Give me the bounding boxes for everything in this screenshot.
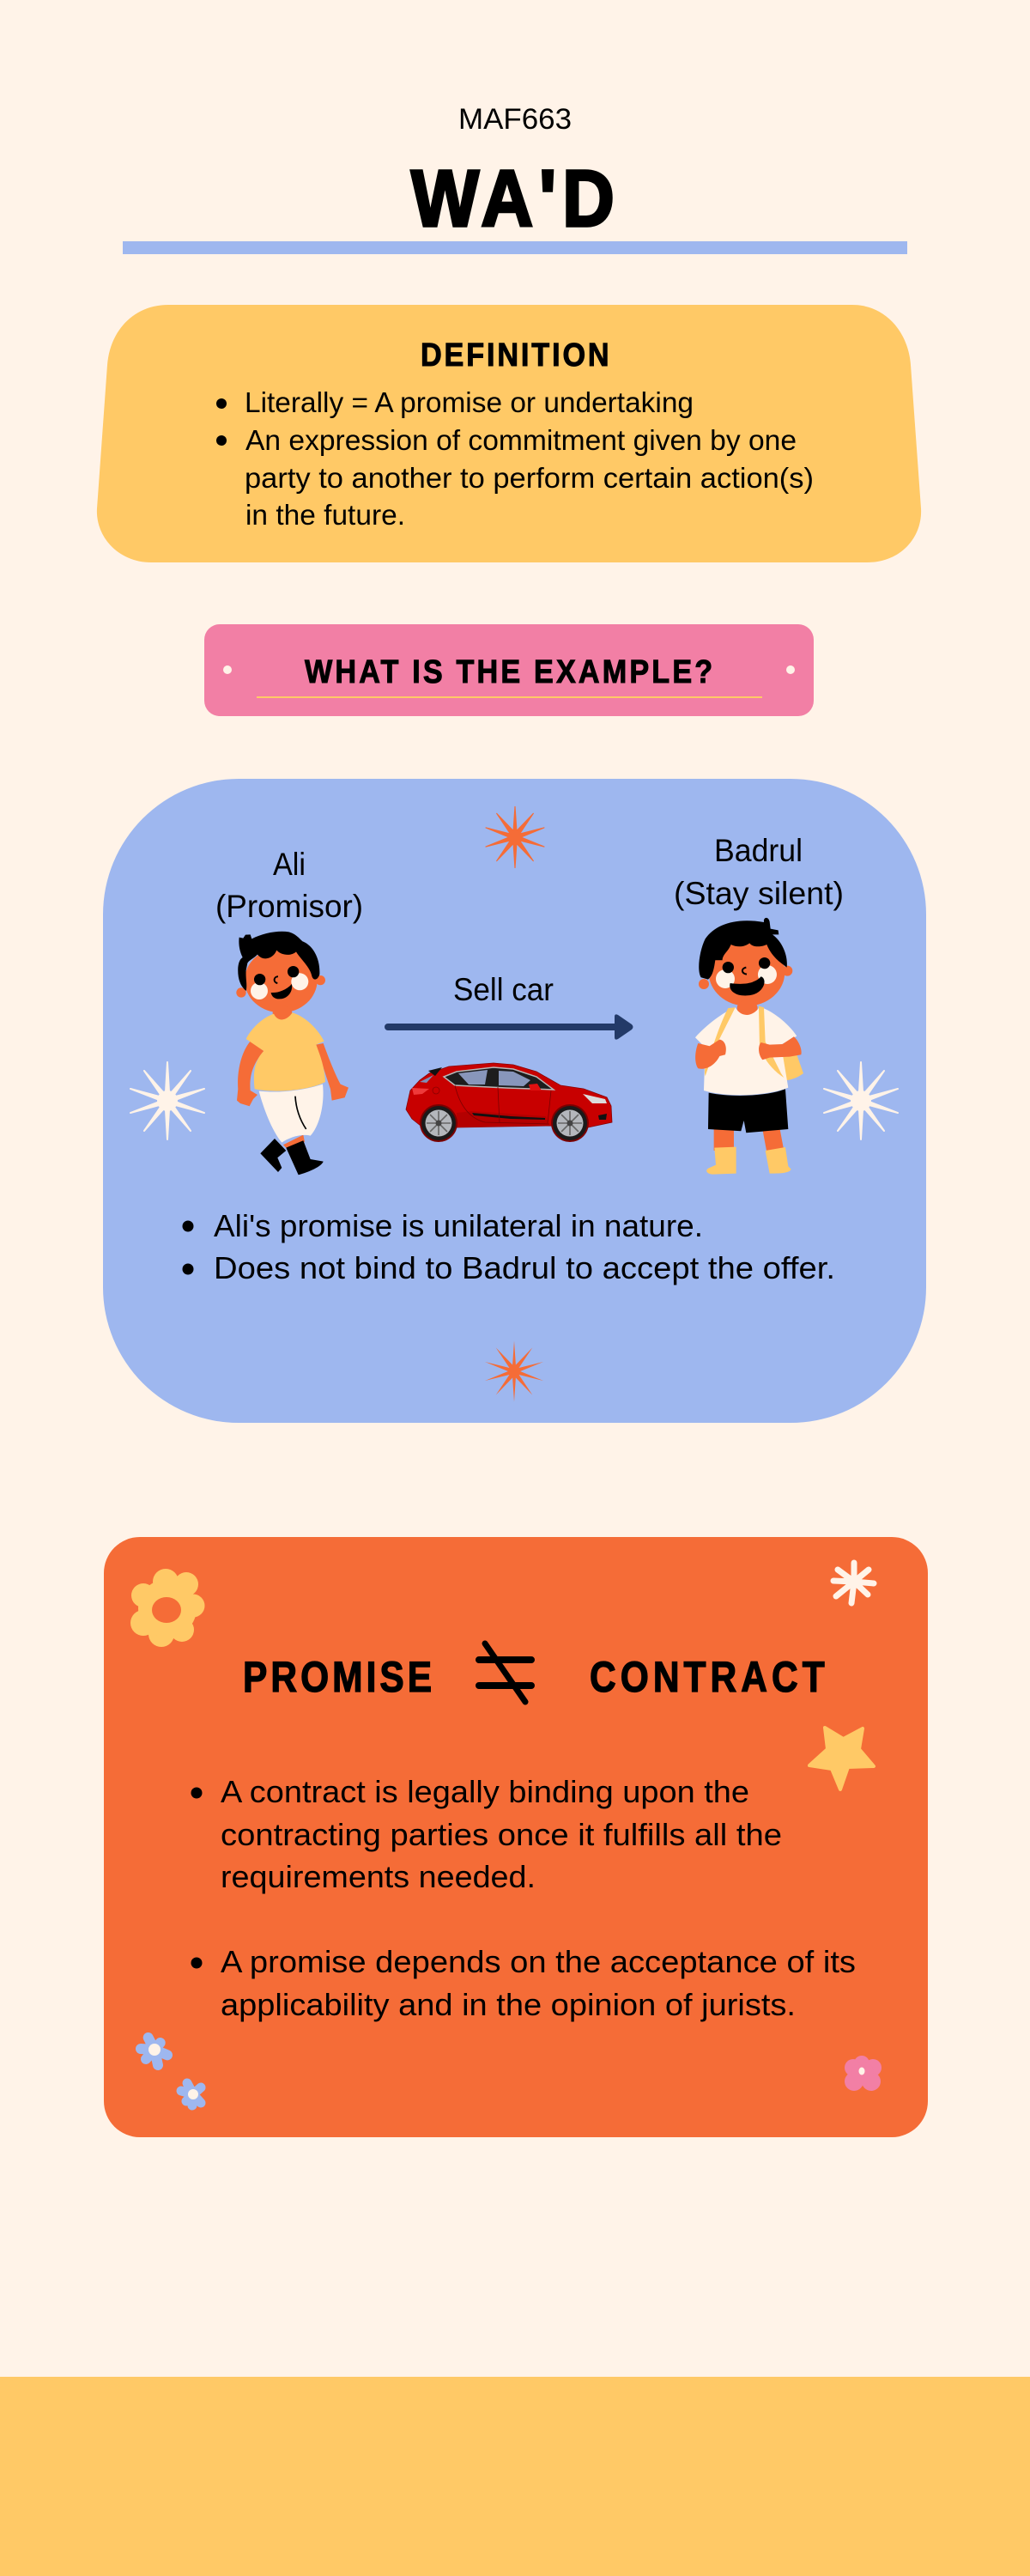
contrast bullets: A promise depends on the acceptance of its bbox=[221, 1944, 856, 1979]
contrast bullets: A contract is legally binding upon the bbox=[221, 1774, 749, 1809]
panel: definition bbox=[97, 305, 921, 562]
arrow: sell car bbox=[385, 1014, 633, 1040]
icon: blue flower small bbox=[181, 2083, 201, 2105]
label: Badrul: (Stay silent) bbox=[674, 876, 844, 911]
example bullets: Ali's promise is unilateral in nature. bbox=[214, 1208, 703, 1243]
footer band bbox=[0, 2377, 1030, 2576]
course code: MAF663 bbox=[458, 103, 572, 136]
label: Badrul bbox=[674, 833, 844, 911]
definition bullets: Literally = A promise or undertaking bbox=[245, 386, 694, 418]
title underline bbox=[123, 241, 907, 254]
banner heading: WHAT IS THE EXAMPLE? bbox=[305, 653, 712, 690]
contrast bullets: applicability and in the opinion of jurists. bbox=[221, 1987, 796, 2022]
icon: pink flower bbox=[845, 2056, 882, 2091]
icon: white asterisk bbox=[833, 1563, 874, 1603]
character: Ali bbox=[236, 932, 348, 1175]
icon: orange star top bbox=[486, 806, 544, 868]
panel: example bbox=[103, 779, 926, 1423]
contrast bullets: contracting parties once it fulfills all the bbox=[221, 1817, 782, 1852]
definition bullets: in the future. bbox=[245, 499, 405, 531]
icon: blue flower large bbox=[141, 2038, 167, 2065]
icon: red car bbox=[406, 1063, 612, 1142]
definition bullets: party to another to perform certain action(s) bbox=[245, 462, 814, 494]
definition bullets bbox=[216, 386, 814, 531]
icon: orange star bottom bbox=[485, 1340, 543, 1402]
character: Badrul bbox=[695, 918, 803, 1175]
label: Ali: Ali bbox=[273, 847, 306, 882]
icon: yellow star bbox=[809, 1728, 874, 1789]
heading: contract: CONTRACT bbox=[590, 1653, 825, 1701]
label: Badrul: Badrul bbox=[714, 833, 803, 868]
icon: yellow flower bbox=[130, 1569, 204, 1647]
icon: white star right bbox=[824, 1062, 898, 1139]
heading: definition: DEFINITION bbox=[421, 336, 609, 373]
label: sell car: Sell car bbox=[453, 972, 554, 1007]
title: WA'D bbox=[411, 154, 615, 243]
banner: what is the example bbox=[204, 624, 814, 716]
label: Ali bbox=[215, 847, 363, 924]
panel: promise vs contract bbox=[104, 1537, 928, 2137]
definition bullets: An expression of commitment given by one bbox=[245, 424, 797, 456]
label: Ali: (Promisor) bbox=[215, 889, 363, 924]
contrast bullets: requirements needed. bbox=[221, 1859, 536, 1894]
icon: white star left bbox=[130, 1062, 204, 1139]
example bullets bbox=[182, 1208, 835, 1285]
contrast bullets bbox=[191, 1774, 856, 2022]
heading: promise: PROMISE bbox=[243, 1653, 432, 1701]
example bullets: Does not bind to Badrul to accept the offer. bbox=[214, 1250, 835, 1285]
icon: not equal bbox=[479, 1643, 531, 1702]
